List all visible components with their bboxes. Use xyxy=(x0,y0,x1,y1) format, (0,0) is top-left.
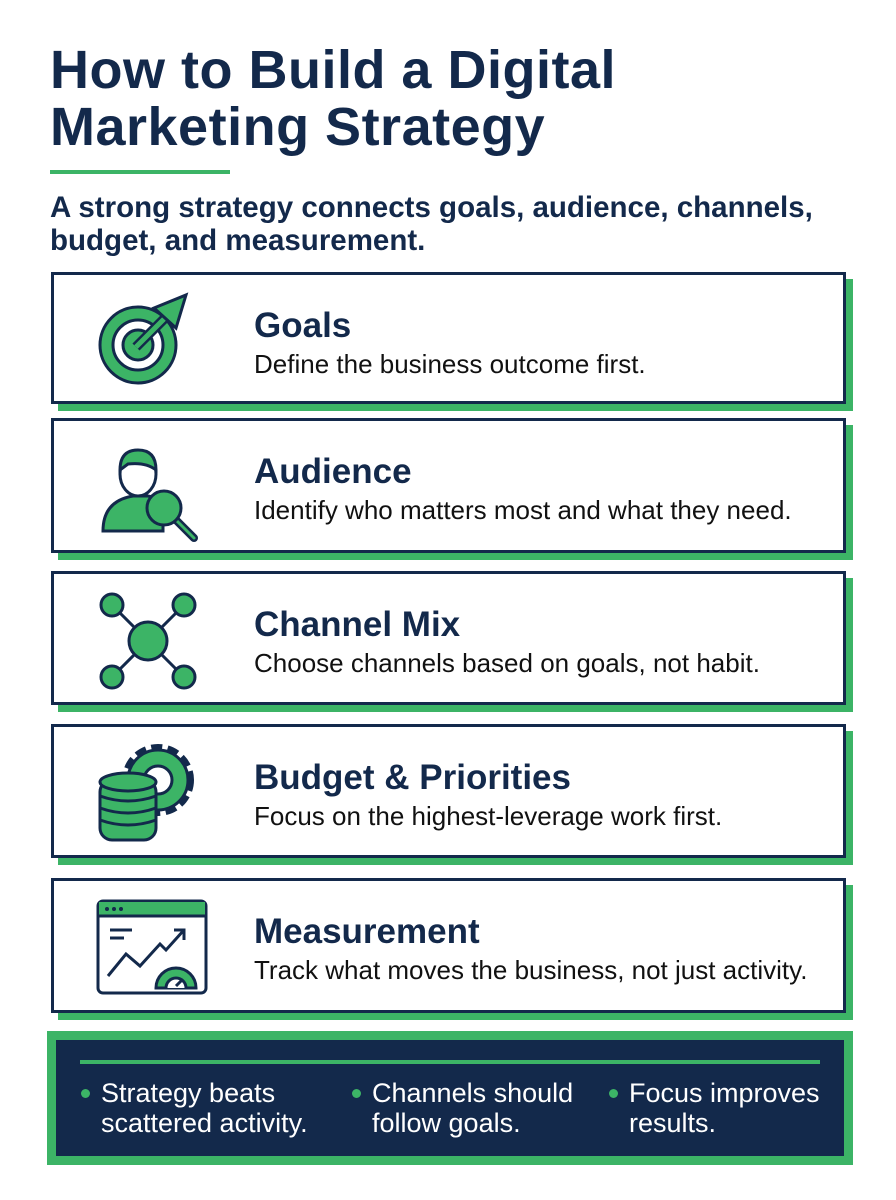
title: How to Build a Digital xyxy=(50,40,616,100)
title underline xyxy=(50,170,230,174)
icon: target arrow xyxy=(98,292,188,384)
bullet 1: Strategy beats xyxy=(101,1078,275,1108)
card: measurement xyxy=(51,878,846,1013)
card: channel mix xyxy=(51,571,846,705)
card: budget xyxy=(51,724,846,858)
icon: network nodes xyxy=(100,592,196,690)
heading: Audience xyxy=(254,452,412,491)
icon: dashboard chart xyxy=(96,900,208,994)
description: Choose channels based on goals, not habit. xyxy=(254,648,760,678)
heading: Measurement xyxy=(254,912,480,951)
heading: Channel Mix xyxy=(254,605,460,644)
title xyxy=(50,40,616,157)
description: Identify who matters most and what they need. xyxy=(254,495,792,525)
card: audience xyxy=(51,418,846,553)
bullet 2 xyxy=(352,1078,573,1138)
bullet 1 xyxy=(81,1078,308,1138)
title: Marketing Strategy xyxy=(50,97,545,157)
description: Define the business outcome first. xyxy=(254,349,646,379)
bullet 3: results. xyxy=(629,1108,716,1138)
description: Track what moves the business, not just activity. xyxy=(254,955,807,985)
heading: Goals xyxy=(254,306,351,345)
summary panel xyxy=(47,1031,853,1165)
icon: database and gear xyxy=(98,744,194,842)
bullet 1: scattered activity. xyxy=(101,1108,308,1138)
icon: person with magnifier xyxy=(102,448,198,542)
bullet 2: Channels should xyxy=(372,1078,573,1108)
bullet 3: Focus improves xyxy=(629,1078,820,1108)
heading: Budget & Priorities xyxy=(254,758,571,797)
bullet 3 xyxy=(609,1078,820,1138)
bullet 2: follow goals. xyxy=(372,1108,521,1138)
subtitle: A strong strategy connects goals, audience, channels, budget, and measurement. xyxy=(50,191,813,257)
description: Focus on the highest-leverage work first. xyxy=(254,801,722,831)
card: goals xyxy=(51,272,846,404)
